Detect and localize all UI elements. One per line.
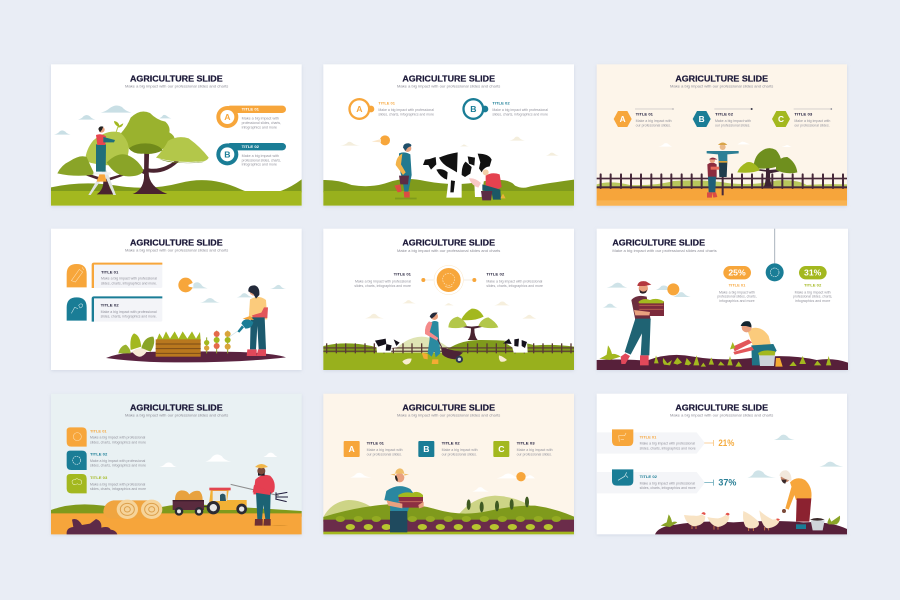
left text: TITLE 01 <box>394 272 411 276</box>
farmer <box>707 158 719 198</box>
title: AGRICULTURE SLIDE <box>675 402 768 412</box>
slide 9: chickens and percentages <box>597 394 847 534</box>
title: AGRICULTURE SLIDE <box>675 74 768 84</box>
ground <box>51 179 302 206</box>
farmer with pitchfork <box>231 464 288 526</box>
person feeding <box>779 470 812 522</box>
chickens <box>684 510 780 531</box>
left text: slides, charts, infographics and more <box>354 284 411 288</box>
item 3: TITLE 03 <box>90 476 107 480</box>
item B: TITLE 02 <box>442 441 460 445</box>
pill 31%: 31% <box>804 268 822 278</box>
soil <box>597 355 848 370</box>
card 2: Make a big impact with professional <box>101 310 157 314</box>
item A: our professional slides. <box>367 453 402 457</box>
slide 1: tree and two callouts <box>51 64 302 206</box>
stat 37%: TITLE 02 <box>640 475 657 479</box>
right text: Make a big impact with professional <box>486 279 543 283</box>
bush <box>67 519 117 534</box>
callout A: Make a big impact with <box>242 117 279 121</box>
sun and clouds <box>350 472 535 492</box>
hay bales <box>103 500 162 519</box>
left text <box>354 272 411 288</box>
hills and trees <box>323 496 574 522</box>
item 3: slides, charts, infographics and more <box>90 487 146 491</box>
tree <box>57 111 209 194</box>
callout A: TITLE 01 <box>378 102 395 106</box>
title: AGRICULTURE SLIDE <box>130 74 223 84</box>
pill 25%: Make a big impact with <box>719 290 755 294</box>
callout A: professional slides, charts, <box>242 121 281 125</box>
item 3 <box>67 474 146 493</box>
callout B: slides, charts, infographics and more <box>492 113 548 117</box>
callout B: infographics and more <box>242 163 277 167</box>
item A: Make a big impact with <box>367 448 403 452</box>
stat 21% <box>597 429 734 454</box>
subtitle: Make a big impact with our professional slides and charts <box>125 413 229 417</box>
stat 37% <box>597 469 736 493</box>
callout B: B <box>470 104 476 114</box>
card 2 <box>67 296 162 322</box>
right text <box>486 272 543 288</box>
farmer with bucket <box>394 143 417 199</box>
item A <box>614 108 674 127</box>
item B: TITLE 02 <box>715 112 733 116</box>
title: AGRICULTURE SLIDE <box>130 238 223 248</box>
leaves and white plant <box>118 333 154 357</box>
item C: TITLE 03 <box>794 112 812 116</box>
soil <box>106 351 286 362</box>
fence <box>597 173 847 189</box>
trailer <box>173 490 210 516</box>
tractor <box>207 488 247 514</box>
clouds <box>159 453 277 467</box>
item C: C <box>498 444 505 454</box>
callout A <box>348 98 434 120</box>
pill 31%: professional slides, charts, <box>793 295 832 299</box>
card 1: slides, charts, infographics and more. <box>101 281 157 285</box>
hanging icon <box>766 229 784 281</box>
item B <box>418 441 478 457</box>
clouds <box>54 105 171 135</box>
item 1 <box>67 427 146 447</box>
item 1: TITLE 01 <box>90 429 107 433</box>
item A <box>344 441 403 457</box>
subtitle: Make a big impact with our professional slides and charts <box>670 85 774 89</box>
item C: TITLE 03 <box>517 441 535 445</box>
callout B: professional slides, charts, <box>242 158 281 162</box>
callout B <box>216 143 286 167</box>
slide 2: cow milking and two callouts <box>323 64 574 206</box>
pill 25%: professional slides, charts, <box>717 295 757 299</box>
slide 4: watering plants and two cards <box>51 229 302 370</box>
clouds <box>658 142 793 147</box>
crops row <box>654 355 831 367</box>
item A: our professional slides. <box>636 123 671 127</box>
item 1: slides, charts, infographics and more <box>90 440 146 444</box>
item A: A <box>349 444 356 454</box>
item 2 <box>67 451 146 470</box>
callout B: B <box>224 149 230 159</box>
soil <box>655 521 847 534</box>
item C <box>772 108 832 127</box>
fence <box>323 343 574 353</box>
item B: B <box>423 444 429 454</box>
farmer with crate <box>621 281 664 365</box>
item 2: Make a big impact with professional <box>90 459 146 463</box>
item A: TITLE 01 <box>636 112 653 116</box>
item B: our professional slides. <box>715 123 750 127</box>
subtitle: Make a big impact with our professional slides and charts <box>397 413 501 417</box>
ground and bushes <box>597 180 847 206</box>
callout B: Make a big impact with <box>242 154 279 158</box>
stat 37%: Make a big impact with professional <box>640 481 695 485</box>
callout B: TITLE 02 <box>492 102 510 106</box>
pill 31%: infographics and more <box>795 299 830 303</box>
pill 25%: TITLE 01 <box>729 284 745 288</box>
tree <box>448 309 498 340</box>
callout A: infographics and more <box>242 125 277 129</box>
item A: A <box>620 114 626 124</box>
cows <box>375 339 528 353</box>
milker <box>481 169 506 200</box>
leaves <box>661 514 840 527</box>
item 3: Make a big impact with professional <box>90 482 146 486</box>
title: AGRICULTURE SLIDE <box>130 402 223 412</box>
title: AGRICULTURE SLIDE <box>402 238 495 248</box>
sun and clouds <box>178 278 286 303</box>
person on ladder <box>88 121 123 195</box>
title: AGRICULTURE SLIDE <box>402 74 495 84</box>
callout A: A <box>224 112 231 122</box>
subtitle: Make a big impact with our professional slides and charts <box>397 249 501 253</box>
subtitle: Make a big impact with our professional slides and charts <box>670 413 774 417</box>
slide 6: crops, pills and two farmers <box>597 229 848 370</box>
slide 3: scarecrow and three hexagons <box>597 64 847 206</box>
stat 21%: slides, charts, infographics and more <box>640 446 696 450</box>
crate with plants <box>156 331 201 357</box>
left text: Make a big impact with professional <box>355 279 411 283</box>
item 2: TITLE 02 <box>90 453 107 457</box>
item B: Make a big impact with <box>442 448 478 452</box>
callout B <box>462 98 548 120</box>
kneeling farmer <box>730 321 783 367</box>
callout B: TITLE 02 <box>242 145 259 149</box>
item C: Make a big impact with <box>517 448 553 452</box>
item A: TITLE 01 <box>367 441 384 445</box>
pill 31% <box>793 266 832 303</box>
pill 25%: 25% <box>728 268 746 278</box>
farmer with crate <box>384 468 424 532</box>
stat 21%: TITLE 01 <box>640 435 656 439</box>
stat 37%: slides, charts, infographics and more <box>640 486 696 490</box>
pill 31%: TITLE 02 <box>804 284 821 288</box>
right text: slides, charts, infographics and more <box>486 284 543 288</box>
callout A <box>216 106 286 129</box>
soil and cabbages <box>323 516 574 534</box>
item C: Make a big impact with <box>794 119 830 123</box>
title: AGRICULTURE SLIDE <box>612 238 705 248</box>
title: AGRICULTURE SLIDE <box>402 402 495 412</box>
ground <box>51 504 302 534</box>
chickens <box>402 355 507 365</box>
stat 37%: 37% <box>718 478 736 488</box>
clouds <box>747 435 843 478</box>
item C: C <box>778 114 784 124</box>
right text: TITLE 02 <box>486 272 504 276</box>
item B <box>693 108 753 127</box>
woman watering <box>229 285 268 356</box>
pill 25% <box>717 266 757 303</box>
subtitle: Make a big impact with our professional slides and charts <box>125 249 229 253</box>
central icon <box>421 265 476 295</box>
item A: Make a big impact with <box>636 119 672 123</box>
callout A: Make a big impact with professional <box>378 108 434 112</box>
subtitle: Make a big impact with our professional slides and charts <box>397 85 501 89</box>
seedlings <box>204 331 231 353</box>
stat 21%: 21% <box>718 438 734 448</box>
item C: our professional slides. <box>794 123 830 127</box>
scarecrow <box>707 142 739 195</box>
slide 8: farmer in field with A B C <box>323 394 574 534</box>
card 2: slides, charts, infographics and more. <box>101 315 157 319</box>
tree <box>737 148 797 188</box>
item C <box>493 441 553 457</box>
cow <box>421 152 492 198</box>
callout A: A <box>356 104 363 114</box>
callout B: Make a big impact with professional <box>492 108 548 112</box>
subtitle: Make a big impact with our professional slides and charts <box>125 85 229 89</box>
card 1: TITLE 01 <box>101 270 118 274</box>
item B: our professional slides. <box>442 453 477 457</box>
sun and clouds <box>340 135 559 156</box>
card 1: Make a big impact with professional <box>101 277 157 281</box>
callout A: TITLE 01 <box>242 108 259 112</box>
hills and ground <box>323 337 574 370</box>
item B: B <box>699 114 705 124</box>
subtitle: Make a big impact with our professional slides and charts <box>612 249 717 253</box>
slide 5: wheelbarrow and central icon <box>323 229 574 370</box>
pill 31%: Make a big impact with <box>795 290 831 294</box>
ground <box>323 179 574 206</box>
left plant <box>599 345 621 360</box>
card 2: TITLE 02 <box>101 304 119 308</box>
woman with wheelbarrow <box>422 312 463 364</box>
item 1: Make a big impact with professional <box>90 436 146 440</box>
card 1 <box>67 263 162 288</box>
item 2: slides, charts, infographics and more <box>90 464 146 468</box>
bucket <box>796 518 825 530</box>
item C: our professional slides. <box>517 453 552 457</box>
pill 25%: infographics and more <box>719 299 755 303</box>
callout A: slides, charts, infographics and more <box>378 113 434 117</box>
sun and clouds <box>603 283 691 308</box>
slide 7: tractor, hay and farmer <box>51 394 302 534</box>
clouds <box>365 300 536 319</box>
stat 21%: Make a big impact with professional <box>640 442 695 446</box>
item B: Make a big impact with <box>715 119 751 123</box>
